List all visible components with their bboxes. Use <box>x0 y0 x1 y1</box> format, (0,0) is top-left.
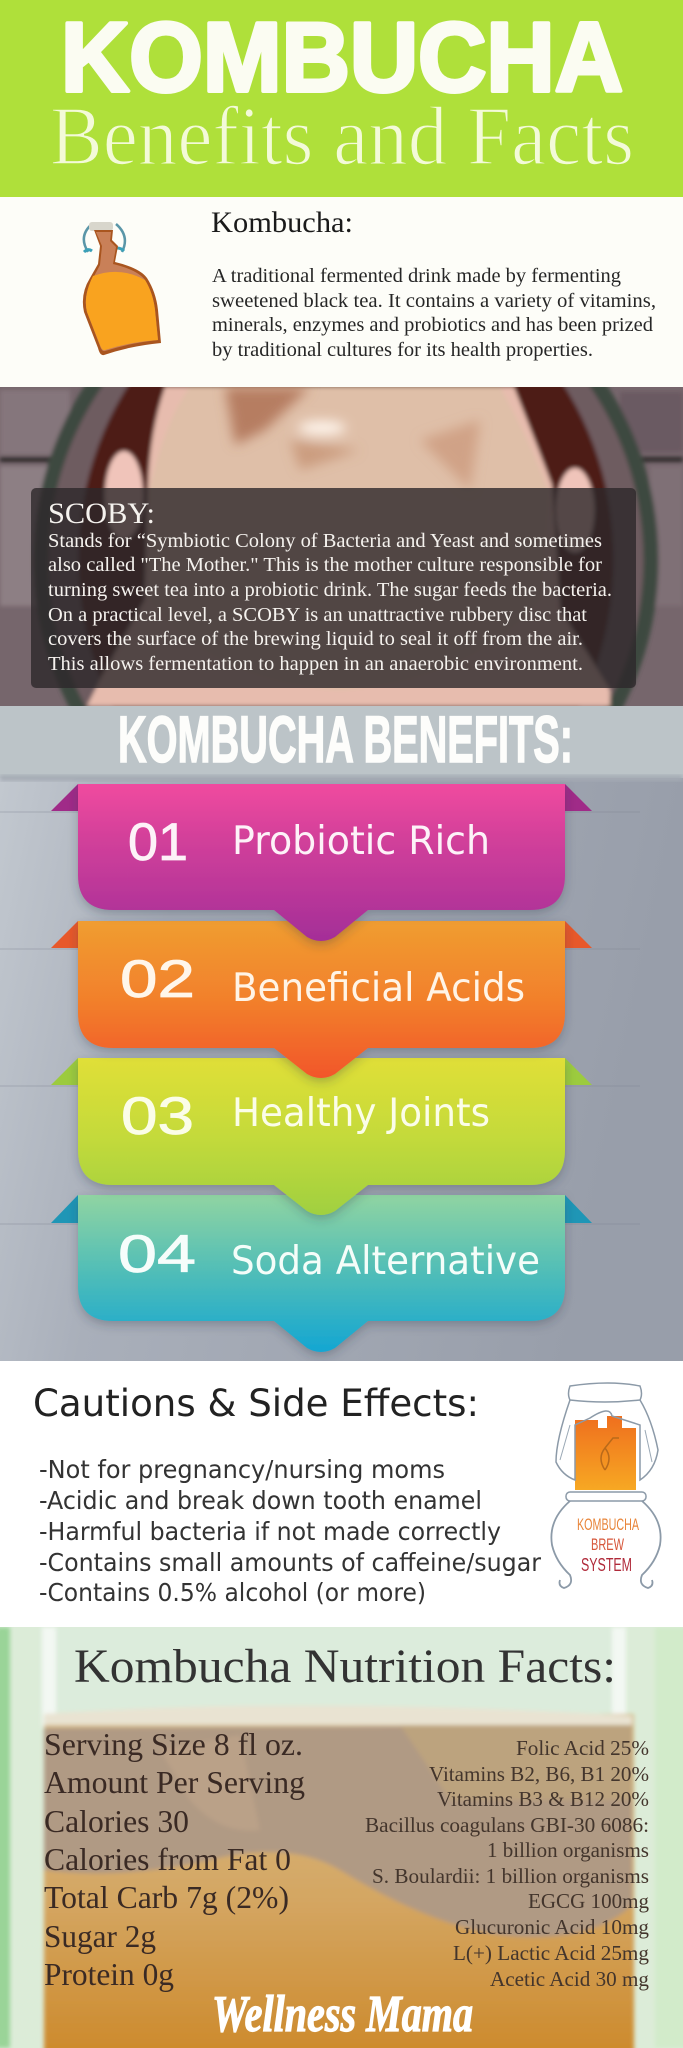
icon: kombucha brew system: SYSTEM <box>581 1555 632 1575</box>
subtitle: Benefits and Facts: Benefits and Facts <box>50 90 634 183</box>
text block: nutrient data: Bacillus coagulans GBI-30 6086: <box>365 1813 649 1837</box>
text block: SCOBY description: On a practical level, a SCOBY is an unattractive rubbery disc that <box>48 604 587 626</box>
text block: nutrient data: EGCG 100mg <box>528 1889 650 1913</box>
header banner <box>0 0 683 197</box>
text block: serving data: Sugar 2g <box>44 1918 156 1954</box>
icon: kombucha brew system: BREW <box>591 1535 624 1554</box>
text block: cautions list: -Not for pregnancy/nursing moms <box>39 1455 445 1484</box>
ribbon 04: Soda Alternative: 04 <box>118 1225 196 1284</box>
text block: cautions list <box>39 1455 542 1607</box>
text block: cautions list: -Contains 0.5% alcohol (or more) <box>39 1578 426 1607</box>
panel: SCOBY photo <box>0 387 683 706</box>
text block: serving data: Amount Per Serving <box>44 1764 305 1800</box>
text block: SCOBY description: covers the surface of the brewing liquid to seal it off from the air. <box>48 628 583 650</box>
panel: kombucha intro <box>0 197 683 387</box>
text block: nutrient data: 1 billion organisms <box>487 1838 649 1862</box>
text block: nutrient data: Vitamins B3 & B12 20% <box>437 1787 649 1811</box>
text block: nutrient data: Folic Acid 25% <box>516 1736 649 1760</box>
text block: cautions list: -Contains small amounts of caffeine/sugar <box>39 1548 542 1577</box>
icon: swing-top bottle <box>83 222 161 355</box>
text block: SCOBY description: also called "The Mother." This is the mother culture responsible for <box>48 554 602 576</box>
logo: Wellness Mama: Wellness Mama <box>212 1986 473 2043</box>
text block: kombucha description <box>212 265 656 361</box>
text block: nutrient data: L(+) Lactic Acid 25mg <box>453 1941 649 1965</box>
text block: nutrient data: S. Boulardii: 1 billion organisms <box>372 1864 649 1888</box>
heading: SCOBY: SCOBY: <box>48 497 155 530</box>
ribbon 02: Beneficial Acids: Beneficial Acids <box>232 966 525 1011</box>
ribbon 01: Probiotic Rich: Probiotic Rich <box>232 819 490 864</box>
text block: serving data: Protein 0g <box>44 1956 174 1992</box>
text block: kombucha description: sweetened black tea. It contains a variety of vitamins, <box>212 290 656 312</box>
heading: cautions: Cautions & Side Effects: <box>33 1382 479 1425</box>
text block: SCOBY description: Stands for “Symbiotic Colony of Bacteria and Yeast and sometimes <box>48 530 602 552</box>
text block: nutrient data: Acetic Acid 30 mg <box>490 1967 649 1991</box>
ribbon 03: Healthy Joints: Healthy Joints <box>232 1091 490 1136</box>
text block: SCOBY description <box>48 530 612 675</box>
text block: kombucha description: minerals, enzymes and probiotics and has been prized <box>212 314 653 336</box>
text block: cautions list: -Harmful bacteria if not made correctly <box>39 1517 501 1546</box>
text block: kombucha description: by traditional cultures for its health properties. <box>212 339 593 361</box>
overlay box <box>31 488 636 688</box>
text block: serving data <box>44 1726 305 1992</box>
text block: serving data: Calories from Fat 0 <box>44 1841 291 1877</box>
text block: SCOBY description: This allows fermentation to happen in an anaerobic environment. <box>48 653 583 675</box>
heading: nutrition facts: Kombucha Nutrition Facts: <box>74 1640 616 1693</box>
text block: SCOBY description: turning sweet tea into a probiotic drink. The sugar feeds the bacteria. <box>48 579 612 601</box>
title: KOMBUCHA: KOMBUCHA <box>61 2 623 112</box>
icon: kombucha brew system <box>551 1383 661 1588</box>
panel: kombucha benefits <box>0 702 683 1361</box>
ribbon 03: Healthy Joints <box>51 1058 592 1215</box>
text block: nutrient data <box>365 1736 650 1991</box>
text block: serving data: Total Carb 7g (2%) <box>44 1879 289 1915</box>
text block: kombucha description: A traditional fermented drink made by fermenting <box>212 265 621 287</box>
panel: cautions and side effects <box>0 1361 683 1627</box>
photo: glass jar with kombucha <box>0 1627 683 2048</box>
heading: Kombucha: Kombucha: <box>211 206 353 239</box>
ribbon 02: Beneficial Acids: 02 <box>120 950 195 1009</box>
text block: serving data: Calories 30 <box>44 1803 189 1839</box>
ribbon 01: Probiotic Rich <box>51 784 592 941</box>
ribbon 04: Soda Alternative <box>51 1195 592 1352</box>
panel: nutrition facts <box>0 1627 683 2048</box>
icon: kombucha brew system: KOMBUCHA <box>577 1515 639 1534</box>
ribbon 03: Healthy Joints: 03 <box>121 1087 194 1146</box>
text block: nutrient data: Vitamins B2, B6, B1 20% <box>429 1762 649 1786</box>
text block: serving data: Serving Size 8 fl oz. <box>44 1726 303 1762</box>
text block: cautions list: -Acidic and break down tooth enamel <box>39 1486 482 1515</box>
ribbon 01: Probiotic Rich: 01 <box>128 813 188 872</box>
photo: wood, bowl, hands and scoby <box>0 387 683 706</box>
ribbon 04: Soda Alternative: Soda Alternative <box>231 1239 540 1284</box>
ribbon 02: Beneficial Acids <box>51 921 592 1078</box>
text block: nutrient data: Glucuronic Acid 10mg <box>455 1915 650 1939</box>
